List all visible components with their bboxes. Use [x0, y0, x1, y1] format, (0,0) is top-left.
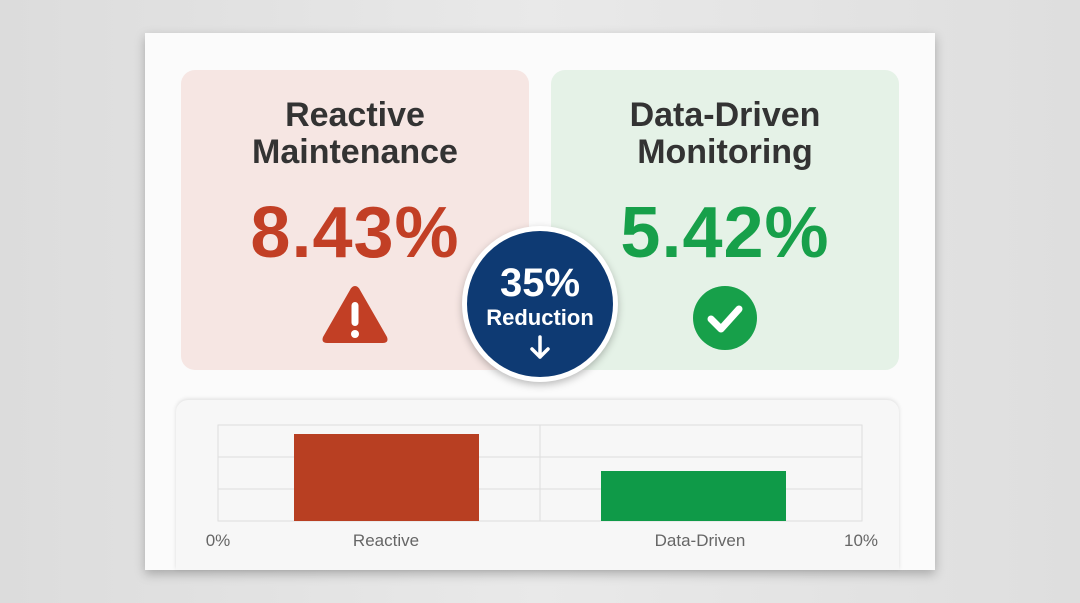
- panel: data-driven monitoring: [551, 70, 899, 370]
- paper sheet: [145, 33, 935, 570]
- heading: data-driven: [630, 96, 820, 171]
- chart card: [176, 400, 899, 570]
- text: Data-Driven: [655, 531, 745, 550]
- heading: reactive: [252, 96, 458, 171]
- value: 8.43%: 8.43%: [250, 193, 460, 273]
- badge: 35% reduction: Reduction: [486, 305, 594, 330]
- panel: reactive maintenance: [181, 70, 529, 370]
- badge: 35% reduction: 35%: [500, 261, 580, 305]
- value: 5.42%: 5.42%: [620, 193, 830, 273]
- heading: data-driven: Monitoring: [637, 133, 813, 171]
- text: 10%: [844, 531, 878, 550]
- axis labels: 0%: [206, 531, 230, 550]
- arrow down: [530, 335, 550, 359]
- text: Reactive: [353, 531, 419, 550]
- icon: warning: [322, 286, 388, 343]
- icon: check: [693, 286, 757, 350]
- heading: reactive: Maintenance: [252, 133, 458, 171]
- heading: reactive: Reactive: [285, 96, 425, 134]
- badge: 35% reduction: [462, 226, 618, 382]
- heading: data-driven: Data-Driven: [630, 96, 820, 134]
